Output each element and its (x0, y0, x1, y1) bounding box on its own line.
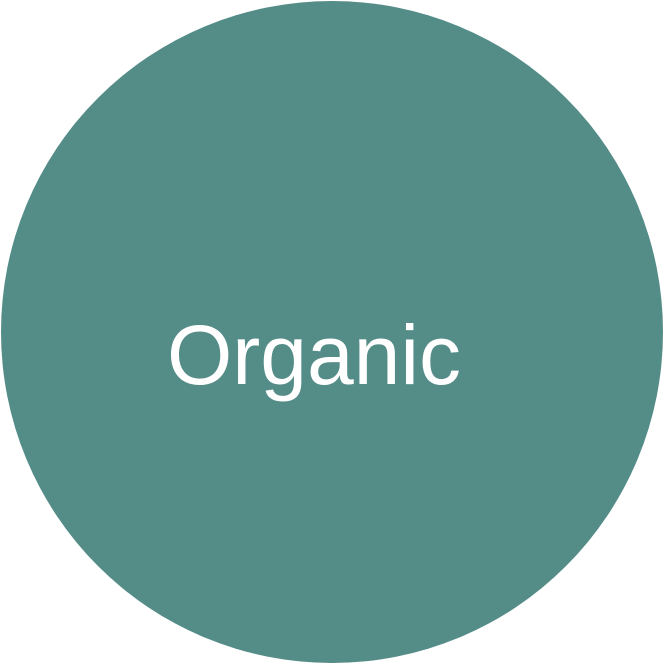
label: Organic: Organic (167, 308, 461, 402)
